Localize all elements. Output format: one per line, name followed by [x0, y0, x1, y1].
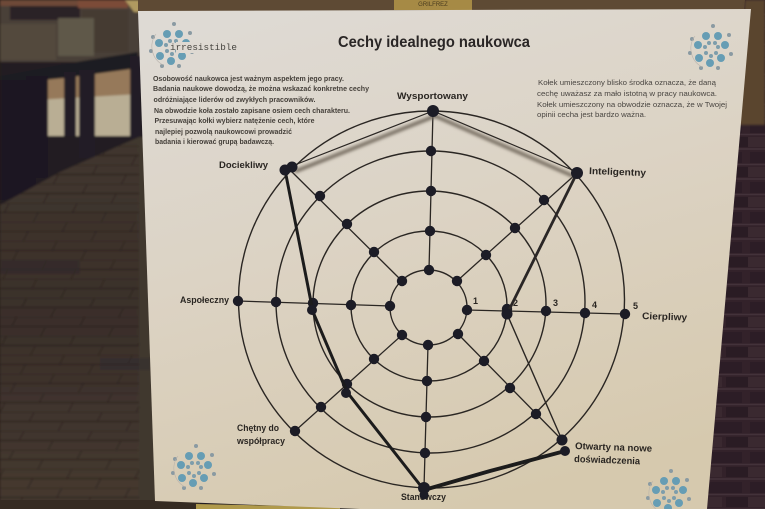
text block: introduction: odróżniające liderów od zwykłych pracowników. — [154, 95, 316, 104]
axis labels: eight traits: współpracy — [236, 436, 286, 447]
panel: white board — [138, 9, 751, 509]
text block: instructions: Kołek umieszczony blisko środka oznacza, że daną — [538, 78, 717, 87]
axis labels: eight traits: Cierpliwy — [642, 311, 688, 324]
text block: instructions: Kołek umieszczony na obwodzie oznacza, że w Twojej — [537, 100, 727, 109]
text block: instructions: cechę uważasz za mało istotną w pracy naukowca. — [537, 89, 717, 98]
axis labels: eight traits: Aspołeczny — [180, 295, 230, 306]
logo: bottom left — [171, 444, 216, 490]
text block: instructions: opinii cecha jest bardzo ważna. — [537, 110, 646, 119]
text block: introduction: Na obwodzie koła zostało zapisane osiem cech charakteru. — [154, 106, 350, 115]
pegs: grid holes — [233, 146, 630, 458]
radar chart: rings and spokes — [238, 111, 625, 488]
scale numbers 1 to 5 — [473, 296, 638, 311]
axis labels: eight traits: Dociekliwy — [219, 160, 269, 171]
logo: top right — [688, 24, 733, 70]
axis labels: eight traits: doświadczenia — [574, 454, 641, 467]
axis labels: eight traits: Stanowczy — [401, 492, 447, 503]
string polygon: example answer — [280, 105, 583, 500]
scale numbers 1 to 5: 4 — [592, 300, 597, 310]
text block: introduction: Osobowość naukowca jest ważnym aspektem jego pracy. — [153, 74, 344, 83]
text block: introduction: Badania naukowe dowodzą, że można wskazać konkretne cechy — [153, 84, 370, 93]
axis labels: eight traits — [180, 91, 688, 503]
text block: introduction — [153, 74, 370, 146]
scale numbers 1 to 5: 5 — [633, 301, 638, 311]
text block: introduction: badania i kierować grupą badawczą. — [155, 137, 274, 146]
logo: bottom right — [646, 469, 691, 509]
text block: introduction: najlepiej pozwolą naukowcowi prowadzić — [155, 127, 292, 136]
scale numbers 1 to 5: 2 — [513, 298, 518, 308]
scale numbers 1 to 5: 1 — [473, 296, 478, 306]
logo: irresistible top left — [149, 22, 240, 68]
text block: instructions — [537, 78, 727, 119]
axis labels: eight traits: Chętny do — [237, 423, 279, 434]
text block: introduction: Przesuwając kołki wybierz natężenie cech, które — [154, 116, 314, 125]
scale numbers 1 to 5: 3 — [553, 298, 558, 308]
title: Cechy idealnego naukowca — [338, 34, 530, 51]
axis labels: eight traits: Otwarty na nowe — [575, 441, 652, 455]
logo: irresistible top left: irresistible — [170, 42, 237, 53]
axis labels: eight traits: Wysportowany — [397, 91, 469, 102]
axis labels: eight traits: Inteligentny — [589, 166, 647, 179]
background: museum room photo: GRILFREZ — [418, 2, 448, 8]
